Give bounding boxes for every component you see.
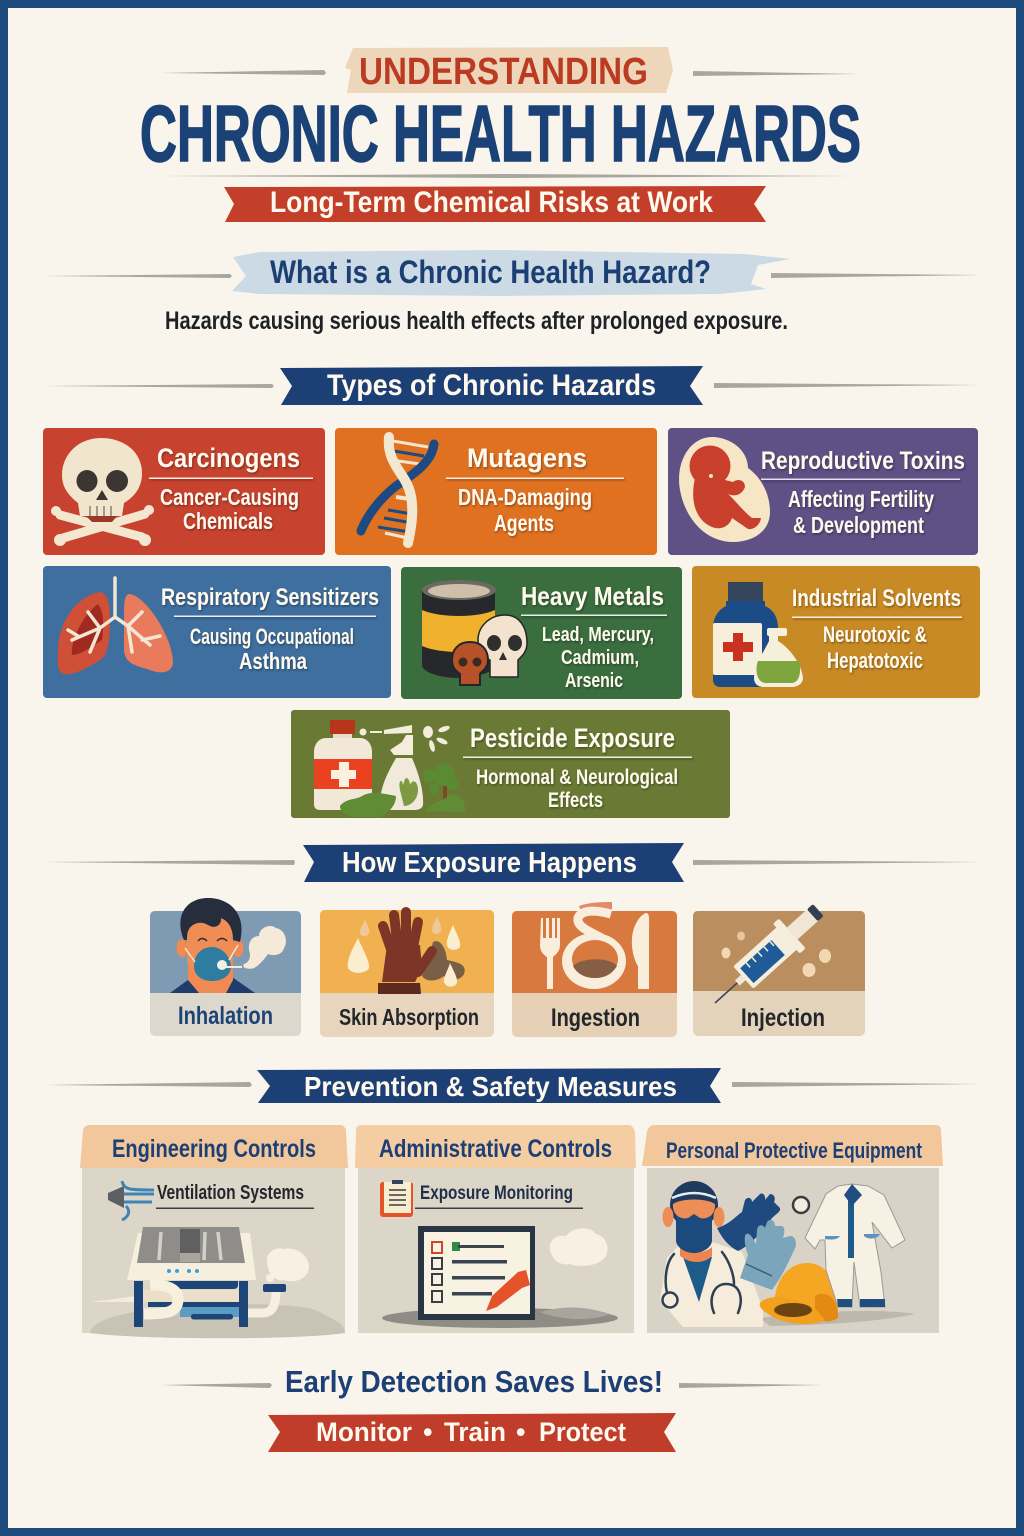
illustration: ventilation unit	[90, 1227, 345, 1338]
heading: Understanding ribbon: UNDERSTANDING	[359, 51, 648, 93]
icon: syringe	[702, 895, 832, 1018]
tile: Skin Absorption: Skin Absorption	[339, 1004, 479, 1030]
icon: glove and droplets	[348, 912, 465, 994]
panel: Carcinogens	[43, 428, 325, 555]
label text: Respiratory Sensitizers	[161, 584, 379, 611]
closing ribbon: Train	[444, 1417, 506, 1447]
closing ribbon: Monitor	[316, 1417, 412, 1447]
label text: Hormonal & Neurological	[476, 766, 678, 789]
panel: Respiratory Sensitizers	[43, 566, 391, 698]
closing ribbon: •	[423, 1417, 432, 1447]
label text: Industrial Solvents	[792, 585, 961, 612]
icon: DNA helix	[361, 437, 434, 543]
closing message: Early Detection Saves Lives!	[285, 1364, 663, 1399]
label text: Carcinogens	[157, 443, 300, 473]
panel: Reproductive Toxins	[668, 428, 978, 555]
label text: Heavy Metals	[521, 581, 664, 611]
icon: pesticide bottle, sprayer and plants	[314, 720, 465, 817]
label text: Mutagens	[467, 443, 587, 473]
panel: Pesticide Exposure	[291, 710, 730, 818]
label text: & Development	[793, 512, 924, 538]
label text: Agents	[494, 510, 554, 536]
icon: clipboard	[380, 1180, 413, 1217]
label text	[761, 447, 965, 538]
tile: Skin Absorption	[320, 910, 494, 1037]
panel: Mutagens	[335, 428, 657, 555]
label text	[149, 443, 313, 534]
label text: Arsenic	[565, 670, 623, 692]
panel: Personal Protective Equipment: Personal Protective Equipment	[666, 1138, 923, 1163]
icon: person wearing mask	[170, 898, 286, 993]
tile: Injection: Injection	[741, 1004, 825, 1032]
label text	[792, 585, 962, 673]
tile: Injection	[693, 895, 865, 1036]
label text: Pesticide Exposure	[470, 723, 675, 753]
tile: Ingestion	[512, 902, 677, 1037]
section heading: What is a Chronic Health Hazard: What is a Chronic Health Hazard?	[270, 254, 711, 290]
tile: Inhalation: Inhalation	[178, 1002, 273, 1030]
icon: drum and skulls	[422, 580, 527, 685]
label text: Asthma	[239, 648, 307, 674]
icon: skull and crossbones	[51, 438, 154, 546]
decorative rules	[44, 70, 982, 1388]
icon: lungs	[58, 578, 173, 674]
label text: Effects	[548, 789, 603, 812]
label text	[521, 581, 667, 692]
closing ribbon: •	[516, 1417, 525, 1447]
section banner: Prevention & Safety Measures: Prevention & Safety Measures	[304, 1071, 677, 1102]
panel: Engineering Controls	[80, 1125, 348, 1338]
label text: Causing Occupational	[190, 624, 354, 649]
illustration: protective worker and gear	[660, 1181, 915, 1327]
panel: Administrative Controls	[355, 1125, 636, 1333]
panel: Heavy Metals	[401, 567, 682, 699]
icon: ventilation fan	[108, 1181, 154, 1220]
icon: fork, plate and knife	[540, 902, 649, 989]
label: Exposure Monitoring: Exposure Monitoring	[420, 1183, 573, 1204]
tile: Inhalation	[150, 898, 301, 1036]
definition text: Hazards causing serious health effects after prolonged exposure.	[165, 307, 788, 335]
label text: Chemicals	[183, 508, 273, 534]
label text: Lead, Mercury,	[542, 624, 654, 646]
panel: Personal Protective Equipment	[642, 1125, 943, 1333]
label text	[446, 443, 624, 536]
panel: Industrial Solvents	[692, 566, 980, 698]
label text: Hepatotoxic	[827, 648, 923, 673]
closing ribbon	[268, 1413, 676, 1452]
label text: Affecting Fertility	[788, 486, 934, 512]
label text: DNA-Damaging	[458, 484, 592, 510]
label text: Cadmium,	[561, 647, 639, 669]
panel: Administrative Controls: Administrative Controls	[379, 1135, 612, 1163]
section banner: Types of Chronic Hazards: Types of Chronic Hazards	[327, 369, 656, 402]
label text: Cancer-Causing	[160, 484, 299, 510]
panel: Engineering Controls: Engineering Controls	[112, 1135, 316, 1163]
icon: fetus	[679, 437, 770, 542]
subtitle ribbon: Long-Term Chemical Risks at Work	[270, 186, 713, 219]
label: Ventilation Systems: Ventilation Systems	[157, 1182, 304, 1204]
section banner: How Exposure Happens: How Exposure Happens	[342, 847, 637, 879]
tile: Ingestion: Ingestion	[551, 1004, 640, 1032]
closing ribbon: Protect	[539, 1417, 626, 1447]
illustration: checklist and pencil	[382, 1226, 618, 1328]
label text	[463, 723, 692, 812]
label text	[161, 584, 379, 674]
icon: bottle and flask	[713, 582, 803, 687]
label text: Reproductive Toxins	[761, 447, 965, 475]
label text: Neurotoxic &	[823, 622, 927, 647]
